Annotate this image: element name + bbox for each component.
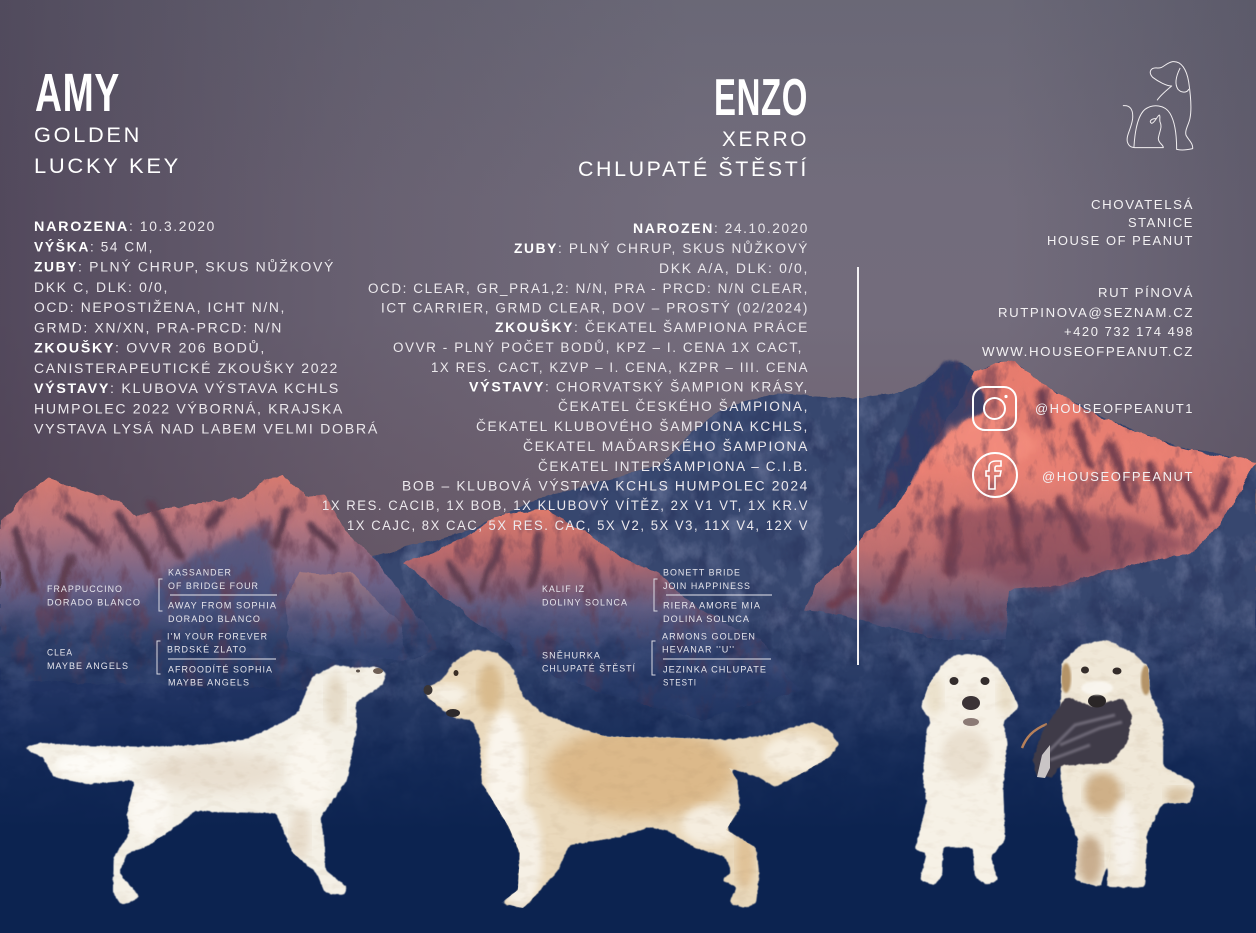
far blue range — [300, 361, 1256, 933]
title: Enzo: XERRO — [722, 128, 809, 151]
text block: kennel name: HOUSE OF PEANUT — [1047, 234, 1194, 248]
pedigree: Enzo: KALIF IZ — [542, 583, 585, 594]
pedigree: Enzo: STESTI — [663, 676, 697, 688]
text block: kennel name: STANICE — [1128, 216, 1194, 230]
text block: Enzo details: ZKOUŠKY — [495, 320, 574, 335]
pedigree: Enzo: DOLINA SOLNCA — [663, 613, 750, 624]
text block: Enzo details: ČEKATEL KLUBOVÉHO ŠAMPIONA KCHLS, — [476, 419, 809, 434]
background: sky — [0, 0, 1256, 640]
vertical divider — [857, 267, 859, 665]
dog photo: retriever carrying a duck — [1022, 640, 1195, 890]
text block: contact: WWW.HOUSEOFPEANUT.CZ — [982, 345, 1194, 359]
pedigree: Amy: OF BRIDGE FOUR — [168, 580, 259, 591]
dog photo: sitting golden retriever — [915, 650, 1020, 890]
dog photo: Amy in profile — [20, 660, 390, 910]
pedigree: Enzo: JOIN HAPPINESS — [663, 580, 751, 591]
pedigree: Enzo: BONETT BRIDE — [663, 566, 741, 578]
text block: Enzo details: 1X CAJC, 8X CAC, 5X RES. CAC, 5X V2, 5X V3, 11X V4, 12X V — [347, 518, 809, 533]
title: Amy: AMY — [35, 63, 120, 123]
icon: instagram — [973, 387, 1016, 430]
middle salmon peak — [403, 510, 800, 720]
text block: Enzo details: ČEKATEL ČESKÉHO ŠAMPIONA, — [558, 399, 809, 414]
text block: Amy details: VÝSTAVY — [34, 381, 110, 396]
pedigree: Amy: AWAY FROM SOPHIA — [168, 600, 277, 610]
pedigree: Enzo: HEVANAR ''U'' — [662, 644, 735, 654]
text block: contact — [982, 285, 1194, 359]
pedigree: Amy: DORADO BLANCO — [47, 596, 141, 608]
text block: Amy details: HUMPOLEC 2022 VÝBORNÁ, KRAJSKA — [34, 401, 344, 416]
text block: Amy details: NAROZENA — [34, 219, 129, 234]
title: Amy: LUCKY KEY — [34, 155, 181, 178]
pedigree: Amy — [47, 566, 277, 688]
text block: Amy details: DKK C, DLK: 0/0, — [34, 280, 169, 295]
text block: Enzo details: : 24.10.2020 — [714, 221, 809, 236]
dog photo: Enzo in profile — [420, 645, 840, 910]
text block: Enzo details: ČEKATEL MAĎARSKÉHO ŠAMPIONA — [523, 439, 809, 454]
pedigree: Amy: MAYBE ANGELS — [47, 660, 129, 671]
text block: Amy details: : OVVR 206 BODŮ, — [115, 340, 266, 356]
text block: Amy details: OCD: NEPOSTIŽENA, ICHT N/N, — [34, 300, 286, 315]
pedigree: Amy: I'M YOUR FOREVER — [167, 630, 268, 642]
text block: Amy details: : 54 CM, — [90, 239, 154, 254]
text block: Amy details: : 10.3.2020 — [129, 219, 216, 234]
text block: Amy details: VYSTAVA LYSÁ NAD LABEM VELMI DOBRÁ — [34, 422, 379, 436]
text block: Enzo details: ZUBY — [514, 241, 558, 256]
pedigree: Amy: KASSANDER — [168, 566, 232, 578]
text block: Enzo details: 1X RES. CACT, KZVP – I. CENA, KZPR – III. CENA — [431, 360, 809, 375]
title: Enzo: CHLUPATÉ ŠTĚSTÍ — [578, 158, 809, 181]
title: Amy: GOLDEN — [34, 124, 142, 147]
text block: Enzo details: : PLNÝ CHRUP, SKUS NŮŽKOVÝ — [558, 241, 809, 256]
text block: Enzo details: : CHORVATSKÝ ŠAMPION KRÁSY, — [545, 380, 809, 394]
text block: Enzo details: OVVR - PLNÝ POČET BODŮ, KPZ – I. CENA 1X CACT, — [393, 340, 803, 355]
facebook handle: @HOUSEOFPEANUT — [1042, 470, 1194, 484]
pedigree: Amy: DORADO BLANCO — [168, 613, 261, 624]
text block: Amy details: VÝŠKA — [34, 239, 90, 254]
icon: facebook — [973, 453, 1017, 497]
text block: Enzo details: 1X RES. CACIB, 1X BOB, 1X KLUBOVÝ VÍTĚZ, 2X V1 VT, 1X KR.V — [322, 498, 809, 513]
text block: Amy details: : PLNÝ CHRUP, SKUS NŮŽKOVÝ — [78, 260, 335, 274]
text block: contact: +420 732 174 498 — [1064, 325, 1194, 339]
pedigree: Enzo: DOLINY SOLNCA — [542, 596, 628, 608]
text block: Enzo details: : ČEKATEL ŠAMPIONA PRÁCE — [574, 320, 809, 335]
pedigree: Amy: FRAPPUCCINO — [47, 583, 123, 594]
text block: Enzo details: NAROZEN — [633, 221, 714, 236]
text block: contact: RUTPINOVA@SEZNAM.CZ — [998, 306, 1194, 320]
right salmon massif — [805, 361, 1256, 640]
text block: Amy details: GRMD: XN/XN, PRA-PRCD: N/N — [34, 320, 283, 335]
navy fade at the bottom — [0, 610, 1256, 933]
text block: Enzo details: VÝSTAVY — [469, 380, 545, 394]
text block: Enzo details: ICT CARRIER, GRMD CLEAR, DOV – PROSTÝ (02/2024) — [381, 301, 809, 316]
title: Enzo — [578, 69, 809, 181]
title: Enzo: ENZO — [714, 69, 808, 127]
snow texture on lower slopes — [0, 604, 1256, 720]
pedigree: Amy: BRDSKÉ ZLATO — [167, 644, 247, 654]
pedigree: Amy: AFROODÍTÉ SOPHIA — [168, 664, 273, 674]
text block: Enzo details: BOB – KLUBOVÁ VÝSTAVA KCHLS HUMPOLEC 2024 — [402, 478, 809, 494]
background: mountains — [0, 360, 1256, 775]
text block: Amy details: : KLUBOVA VÝSTAVA KCHLS — [110, 381, 340, 396]
text block: Enzo details — [322, 221, 809, 533]
text block: Amy details: ZKOUŠKY — [34, 340, 115, 356]
text block: kennel name — [1047, 197, 1194, 248]
text block: Amy details: CANISTERAPEUTICKÉ ZKOUŠKY 2022 — [34, 361, 339, 376]
pedigree: Enzo: JEZINKA CHLUPATE — [663, 664, 767, 674]
icon: dog and cat logo — [1123, 62, 1193, 150]
pedigree: Amy: CLEA — [47, 646, 73, 658]
text block: contact: RUT PÍNOVÁ — [1098, 285, 1194, 300]
text block: Enzo details: DKK A/A, DLK: 0/0, — [659, 261, 809, 276]
pedigree: Enzo: CHLUPATÉ ŠTĚSTÍ — [542, 662, 636, 674]
pedigree: Enzo: SNĚHURKA — [542, 650, 601, 660]
small front peak — [285, 572, 410, 660]
title: Amy — [34, 63, 181, 178]
pedigree: Enzo — [542, 566, 772, 688]
text block: Enzo details: ČEKATEL INTERŠAMPIONA – C.I.B. — [538, 459, 809, 474]
pedigree: Amy: MAYBE ANGELS — [168, 676, 250, 688]
left range — [0, 475, 440, 690]
text block: Enzo details: OCD: CLEAR, GR_PRA1,2: N/N, PRA - PRCD: N/N CLEAR, — [368, 281, 809, 296]
text block: Amy details — [34, 219, 379, 436]
text block: Amy details: ZUBY — [34, 260, 78, 274]
pedigree: Enzo: RIERA AMORE MIA — [663, 600, 761, 610]
pedigree: Enzo: ARMONS GOLDEN — [662, 630, 756, 642]
text block: kennel name: CHOVATELSÁ — [1091, 197, 1194, 212]
instagram handle: @HOUSEOFPEANUT1 — [1035, 402, 1194, 416]
